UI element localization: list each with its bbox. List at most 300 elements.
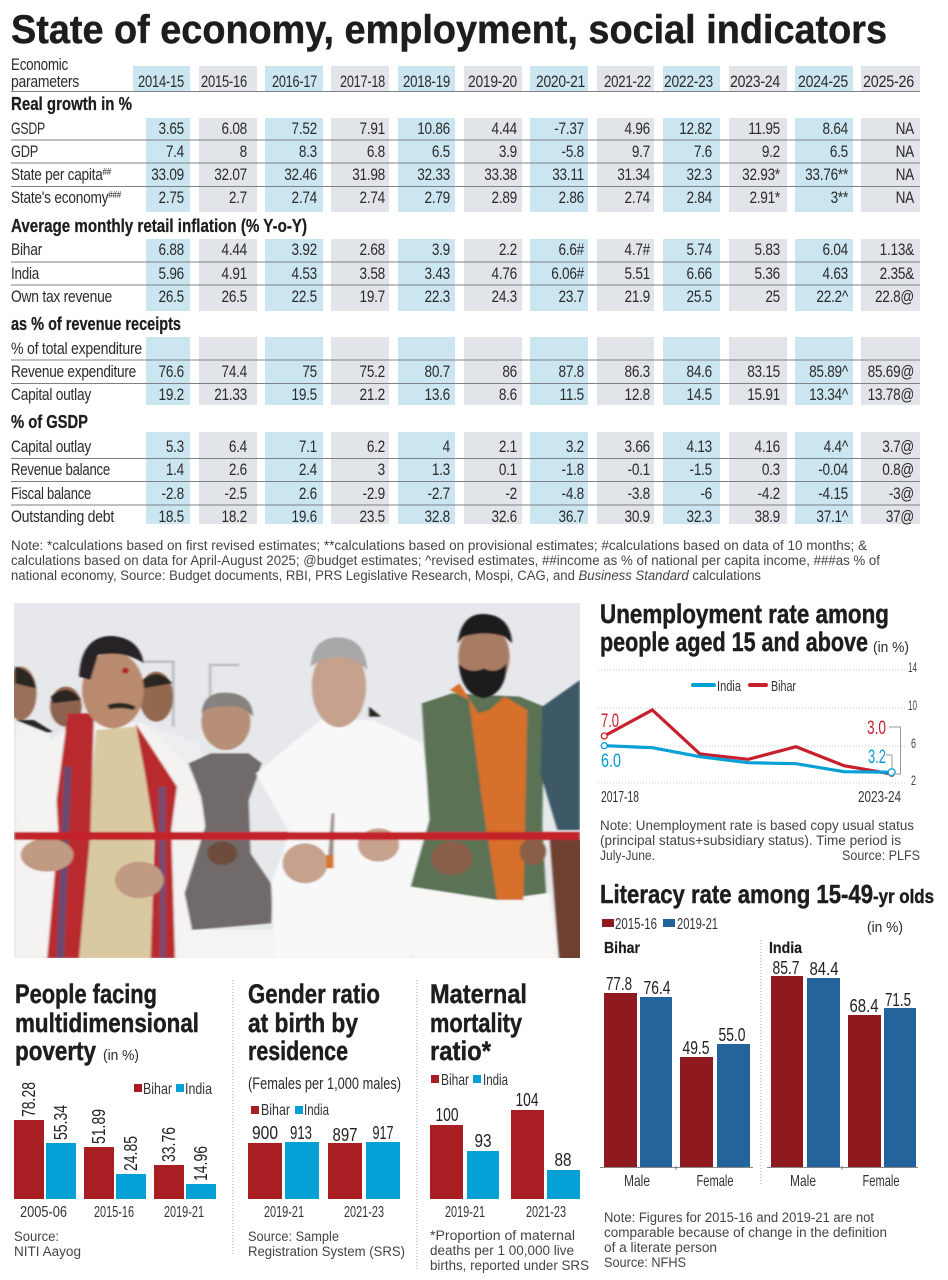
row: outstanding debt: 32.6 — [492, 508, 517, 526]
bar chart: poverty: 51.89 — [89, 1109, 109, 1144]
row: revenue expenditure: 86 — [502, 363, 517, 381]
row: capital outlay GSDP: 3.2 — [566, 438, 584, 456]
row: capital outlay GSDP: 4.4^ — [824, 438, 849, 456]
row: India inflation — [11, 264, 915, 283]
row: capital outlay GSDP: 4.16 — [755, 438, 780, 456]
row: GDP: 3.9 — [499, 143, 517, 161]
row: Bihar inflation: 2.2 — [499, 241, 517, 259]
row: GSDP: -7.37 — [554, 120, 584, 138]
heading: maternal mortality: Maternal — [430, 979, 527, 1009]
row: revenue balance: 2.4 — [299, 461, 318, 479]
row: Bihar inflation: 2.68 — [360, 241, 385, 259]
row: fiscal balance: -4.15 — [818, 485, 848, 503]
row: capital outlay GSDP: Capital outlay — [11, 437, 92, 456]
panel: unemployment rate — [598, 599, 920, 863]
row: Bihar inflation: 5.83 — [755, 241, 780, 259]
row: revenue balance: Revenue balance — [11, 460, 110, 479]
row: outstanding debt: 38.9 — [755, 508, 780, 526]
section heading: percent of GSDP: % of GSDP — [11, 412, 88, 432]
row: capital outlay GSDP: 4.13 — [687, 438, 712, 456]
bar chart: maternal mortality: 104 — [516, 1090, 538, 1110]
row: state's economy — [11, 188, 915, 207]
row: revenue expenditure: 86.3 — [625, 363, 650, 381]
row: state per capita: State per capita — [11, 165, 125, 184]
subtitle: gender ratio: (Females per 1,000 males) — [248, 1074, 401, 1093]
row: fiscal balance: -3@ — [889, 485, 914, 503]
heading: unemployment: people aged 15 and above — [600, 627, 868, 657]
row: outstanding debt: 30.9 — [625, 508, 650, 526]
row: state per capita: 32.93* — [742, 166, 780, 184]
bar chart: maternal mortality: 88 — [554, 1150, 572, 1170]
source: poverty: NITI Aayog — [14, 1244, 81, 1259]
row: GSDP: 6.08 — [222, 120, 247, 138]
row: Bihar inflation: 4.44 — [222, 241, 248, 259]
heading: poverty: poverty — [15, 1036, 96, 1066]
row: capital outlay GSDP: 6.2 — [367, 438, 385, 456]
row: revenue expenditure — [11, 362, 914, 381]
row: India inflation: 6.06# — [551, 265, 585, 283]
row: GSDP: 7.52 — [292, 120, 317, 138]
row: revenue expenditure: 74.4 — [222, 363, 248, 381]
row: India inflation: India — [11, 264, 40, 283]
row: state's economy: State's economy — [11, 188, 132, 207]
row: capital outlay GSDP: 3.66 — [625, 438, 650, 456]
row: outstanding debt: 37@ — [886, 508, 914, 526]
row: fiscal balance: -2.9 — [363, 485, 385, 503]
row: GDP: NA — [896, 143, 915, 161]
header row: 2016-17 — [272, 72, 317, 91]
row: Bihar inflation: 4.7# — [625, 241, 651, 259]
heading: literacy — [600, 879, 934, 936]
row: India inflation: 6.66 — [687, 265, 712, 283]
bar chart: Bihar literacy: 55.0 — [718, 1025, 746, 1045]
legend: poverty: Bihar — [143, 1081, 173, 1098]
bar chart: India literacy: 85.7 — [772, 958, 800, 978]
row: GSDP — [11, 119, 915, 138]
row: capital outlay share: 12.8 — [625, 386, 650, 404]
row: own tax revenue: 26.5 — [222, 288, 247, 306]
row: state's economy: 2.74 — [292, 189, 318, 207]
row: revenue expenditure: 75.2 — [360, 363, 385, 381]
row: own tax revenue: 24.3 — [492, 288, 517, 306]
row: state's economy: 2.89 — [492, 189, 517, 207]
row: outstanding debt — [11, 507, 914, 526]
bar chart: poverty: 2019-21 — [164, 1204, 204, 1221]
row: capital outlay share: 21.33 — [214, 386, 247, 404]
row: India inflation: 4.53 — [292, 265, 317, 283]
row: Bihar inflation: Bihar — [11, 240, 43, 259]
photo: ribbon cutting ceremony — [5, 603, 587, 962]
legend: literacy: 2015-16 — [615, 916, 657, 933]
background people — [14, 666, 202, 826]
note: literacy: Source: NFHS — [604, 1255, 686, 1270]
bar chart: poverty: 33.76 — [159, 1127, 179, 1162]
row: revenue balance: 0.1 — [499, 461, 517, 479]
legend: gender ratio: Bihar — [261, 1102, 291, 1119]
row: GSDP: 7.91 — [360, 120, 385, 138]
row: state per capita: NA — [896, 166, 915, 184]
note: maternal mortality: births, reported under SRS — [430, 1258, 589, 1273]
row: revenue balance: -0.04 — [818, 461, 849, 479]
row: GDP: 7.6 — [694, 143, 712, 161]
row: own tax revenue: 22.3 — [425, 288, 450, 306]
bar chart: Bihar literacy: Bihar — [604, 940, 640, 957]
heading: literacy: -yr olds — [873, 887, 934, 908]
table note: Note: *calculations based on first revised estimates; **calculations based on provisional estimates; #calculations based on data of 10 months; & — [11, 538, 867, 553]
row: GSDP: 11.95 — [748, 120, 780, 138]
row: revenue balance: 0.3 — [762, 461, 780, 479]
row: revenue expenditure: 85.69@ — [868, 363, 914, 381]
section heading: inflation: Average monthly retail inflation (% Y-o-Y) — [11, 216, 307, 236]
heading: gender ratio: residence — [248, 1036, 348, 1066]
panel: literacy rate — [600, 879, 934, 1270]
header row: 2015-16 — [201, 72, 247, 91]
source: gender ratio — [248, 1229, 405, 1259]
note: maternal mortality — [430, 1228, 589, 1273]
row: revenue expenditure: 76.6 — [159, 363, 184, 381]
heading: poverty: People facing — [15, 979, 157, 1009]
row: GSDP: 4.44 — [492, 120, 518, 138]
row: Bihar inflation: 6.88 — [159, 241, 184, 259]
man with red scarf — [15, 636, 211, 958]
legend: maternal mortality — [431, 1072, 508, 1089]
row: state's economy: 2.75 — [159, 189, 184, 207]
row: fiscal balance: 2.6 — [299, 485, 317, 503]
row: fiscal balance: -2 — [505, 485, 517, 503]
man in grey vest — [185, 693, 275, 958]
bar chart: gender ratio: 2021-23 — [344, 1204, 384, 1221]
note: unemployment: (principal status+subsidiary status). Time period is — [600, 833, 901, 848]
row: state's economy: 2.74 — [360, 189, 386, 207]
bar chart: Bihar literacy — [600, 940, 753, 1190]
row: state per capita: 32.46 — [284, 166, 317, 184]
bar chart: poverty: 14.96 — [191, 1146, 211, 1181]
bar chart: India literacy: Female — [862, 1173, 900, 1190]
row: India inflation: 2.35& — [880, 265, 915, 283]
row: GDP: 6.5 — [830, 143, 848, 161]
row: Bihar inflation: 6.04 — [823, 241, 849, 259]
header row: parameters — [11, 72, 79, 91]
header row: 2018-19 — [403, 72, 450, 91]
row: state's economy: 2.86 — [559, 189, 584, 207]
bar chart: maternal mortality: 93 — [474, 1131, 492, 1151]
header row: 2020-21 — [536, 72, 585, 91]
row: state per capita — [11, 165, 915, 184]
title: State of economy, employment, social indicators — [11, 8, 887, 52]
row: capital outlay GSDP: 5.3 — [166, 438, 184, 456]
heading: poverty: multidimensional — [15, 1008, 199, 1038]
heading: maternal mortality: ratio* — [430, 1036, 491, 1066]
header row: 2023-24 — [730, 72, 780, 91]
row: India inflation: 4.76 — [492, 265, 517, 283]
row: GSDP: 3.65 — [159, 120, 184, 138]
line chart: unemployment: 10 — [908, 697, 917, 713]
heading: maternal mortality — [430, 979, 527, 1066]
row: own tax revenue: 22.5 — [292, 288, 317, 306]
legend: literacy — [602, 916, 718, 933]
legend: maternal mortality: Bihar — [441, 1072, 469, 1089]
row: state per capita: 32.3 — [687, 166, 712, 184]
row: revenue balance: 0.8@ — [882, 461, 914, 479]
bar chart: India literacy: 71.5 — [885, 990, 911, 1010]
row: own tax revenue: 25 — [765, 288, 780, 306]
heading: gender ratio — [248, 979, 380, 1066]
legend: poverty: India — [185, 1081, 212, 1098]
note: unemployment: Note: Unemployment rate is based copy usual status — [600, 818, 914, 833]
row: state per capita: 31.34 — [617, 166, 651, 184]
row: fiscal balance: -2.5 — [225, 485, 247, 503]
bar chart: Bihar literacy: Female — [696, 1173, 734, 1190]
row: GDP: 7.4 — [166, 143, 185, 161]
row: GDP: GDP — [11, 142, 38, 161]
row: own tax revenue: 25.5 — [687, 288, 712, 306]
table note — [11, 538, 880, 583]
row: Bihar inflation: 1.13& — [880, 241, 915, 259]
row: capital outlay GSDP: 6.4 — [229, 438, 248, 456]
row: India inflation: 4.91 — [222, 265, 247, 283]
row: percent of total expenditure: % of total expenditure — [11, 339, 142, 358]
row: state per capita: 33.09 — [151, 166, 184, 184]
bar chart: India literacy: India — [769, 940, 802, 957]
bar chart: poverty: 2015-16 — [94, 1204, 134, 1221]
bar chart: poverty: 2005-06 — [20, 1204, 67, 1221]
header row: 2017-18 — [340, 72, 385, 91]
row: revenue balance: 3 — [378, 461, 385, 479]
bar chart: Bihar literacy: Male — [624, 1173, 650, 1190]
row: India inflation: 3.43 — [425, 265, 450, 283]
row: revenue balance: 1.3 — [432, 461, 450, 479]
note: maternal mortality: *Proportion of maternal — [430, 1228, 575, 1243]
row: capital outlay share: 13.6 — [425, 386, 450, 404]
row: outstanding debt: 32.8 — [425, 508, 450, 526]
bar chart: poverty: 55.34 — [51, 1105, 71, 1140]
row: state's economy: 2.7 — [229, 189, 247, 207]
row: state per capita: 32.07 — [214, 166, 247, 184]
row: capital outlay share — [11, 385, 914, 404]
header row: 2014-15 — [138, 72, 184, 91]
row: revenue balance: 1.4 — [166, 461, 185, 479]
row: capital outlay share: 15.91 — [747, 386, 780, 404]
row: fiscal balance: -6 — [700, 485, 712, 503]
bar chart: gender ratio — [248, 1123, 400, 1221]
panel: multidimensional poverty — [14, 979, 216, 1259]
bar chart: gender ratio: 900 — [252, 1123, 278, 1143]
heading: gender ratio: at birth by — [248, 1008, 358, 1038]
note: maternal mortality: deaths per 1 00,000 live — [430, 1243, 574, 1258]
row: own tax revenue — [11, 287, 914, 306]
row: GSDP: 4.96 — [625, 120, 650, 138]
header row: 2024-25 — [798, 72, 848, 91]
row: own tax revenue: 22.2^ — [816, 288, 849, 306]
line chart: unemployment — [598, 659, 917, 806]
row: India inflation: 4.63 — [823, 265, 848, 283]
bar chart: India literacy: 68.4 — [850, 996, 878, 1016]
row: own tax revenue: 19.7 — [360, 288, 385, 306]
row: state's economy: NA — [896, 189, 915, 207]
line chart: unemployment: 14 — [908, 659, 917, 675]
row: GDP: 6.8 — [367, 143, 385, 161]
man at right edge — [540, 680, 580, 958]
row: GSDP: 10.86 — [417, 120, 450, 138]
line chart: unemployment: 2023-24 — [858, 789, 901, 806]
panel: maternal mortality ratio — [430, 979, 589, 1273]
table note: national economy, Source: Budget documents, RBI, PRS Legislative Research, Mospi, CAG, and Business Standard calculations — [11, 568, 761, 583]
row: outstanding debt: 36.7 — [559, 508, 584, 526]
note: unemployment — [600, 818, 920, 863]
row: GDP: 9.7 — [632, 143, 650, 161]
row: capital outlay share: 21.2 — [360, 386, 385, 404]
header row: 2021-22 — [604, 72, 651, 91]
header row: 2022-23 — [664, 72, 713, 91]
row: GDP — [11, 142, 915, 161]
row: GSDP: 8.64 — [823, 120, 849, 138]
row: capital outlay share: Capital outlay — [11, 385, 92, 404]
row: revenue expenditure: 75 — [302, 363, 317, 381]
row: capital outlay share: 11.5 — [560, 386, 584, 404]
heading: unemployment: (in %) — [873, 639, 909, 656]
section heading: real growth: Real growth in % — [11, 94, 132, 114]
row: revenue expenditure: 87.8 — [559, 363, 584, 381]
heading: literacy: (in %) — [867, 919, 903, 936]
row: capital outlay share: 14.5 — [687, 386, 712, 404]
line chart: unemployment: Bihar — [771, 678, 796, 695]
bar chart: maternal mortality — [430, 1090, 580, 1221]
row: fiscal balance — [11, 484, 914, 503]
heading: unemployment — [600, 599, 909, 657]
row: outstanding debt: Outstanding debt — [11, 507, 114, 526]
source: poverty — [14, 1229, 81, 1259]
bar chart: gender ratio: 913 — [290, 1123, 312, 1143]
row: state's economy: 3** — [831, 189, 848, 207]
row: state per capita: 33.11 — [552, 166, 584, 184]
row: capital outlay GSDP: 4 — [443, 438, 451, 456]
row: GSDP: GSDP — [11, 119, 45, 138]
row: GDP: 8 — [240, 143, 247, 161]
heading: poverty — [15, 979, 199, 1066]
bar chart: poverty — [14, 1082, 216, 1221]
line chart: unemployment: 2017-18 — [601, 789, 639, 806]
line chart: unemployment: 3.2 — [868, 747, 886, 768]
row: state's economy: 2.79 — [425, 189, 450, 207]
legend: poverty — [134, 1081, 212, 1098]
header row: Economic — [11, 55, 69, 74]
row: India inflation: 3.58 — [360, 265, 385, 283]
row: own tax revenue: 22.8@ — [875, 288, 914, 306]
man in white kurta — [256, 637, 433, 958]
row: own tax revenue: 23.7 — [559, 288, 584, 306]
line chart: unemployment: 6.0 — [601, 751, 621, 772]
row: state's economy: ### — [108, 190, 122, 201]
row: revenue expenditure: 80.7 — [425, 363, 450, 381]
note: unemployment: July-June. — [600, 848, 655, 863]
row: Bihar inflation: 3.92 — [292, 241, 317, 259]
bar chart: maternal mortality: 2021-23 — [526, 1204, 566, 1221]
row: capital outlay share: 19.2 — [159, 386, 184, 404]
row: capital outlay share: 19.5 — [292, 386, 317, 404]
row: outstanding debt: 23.5 — [360, 508, 385, 526]
row: capital outlay share: 13.78@ — [868, 386, 914, 404]
row: Bihar inflation: 5.74 — [687, 241, 713, 259]
row: capital outlay GSDP: 2.1 — [499, 438, 517, 456]
heading: maternal mortality: mortality — [430, 1008, 522, 1038]
legend: maternal mortality: India — [483, 1072, 508, 1089]
header row — [11, 55, 914, 91]
table note: calculations based on data for April-August 2025; @budget estimates; ^revised estimates, ##income as % of national per capita income, ###as % of — [11, 553, 880, 568]
row: India inflation: 5.51 — [625, 265, 650, 283]
bar chart: maternal mortality: 100 — [436, 1105, 458, 1125]
legend: literacy: 2019-21 — [677, 916, 718, 933]
row: GSDP: NA — [896, 120, 915, 138]
bar chart: Bihar literacy: 49.5 — [682, 1038, 710, 1058]
row: GDP: 6.5 — [432, 143, 450, 161]
row: fiscal balance: -2.8 — [162, 485, 184, 503]
bar chart: Bihar literacy: 77.8 — [606, 974, 632, 994]
bar chart: gender ratio: 917 — [372, 1123, 394, 1143]
row: state per capita: 33.76** — [805, 166, 848, 184]
row: India inflation: 5.36 — [755, 265, 780, 283]
bar chart: poverty: 24.85 — [121, 1136, 141, 1171]
legend: gender ratio — [251, 1102, 329, 1119]
row: outstanding debt: 32.3 — [687, 508, 712, 526]
row: capital outlay share: 8.6 — [499, 386, 517, 404]
bar chart: Bihar literacy: 76.4 — [644, 978, 670, 998]
note: literacy: of a literate person — [604, 1240, 717, 1255]
row: outstanding debt: 19.6 — [292, 508, 317, 526]
row: outstanding debt: 18.2 — [222, 508, 247, 526]
row: outstanding debt: 18.5 — [159, 508, 184, 526]
row: revenue balance: -0.1 — [628, 461, 650, 479]
bar chart: India literacy: Male — [790, 1173, 816, 1190]
row: revenue balance: -1.5 — [690, 461, 712, 479]
row: Bihar inflation: 3.9 — [432, 241, 450, 259]
row: own tax revenue: 21.9 — [625, 288, 650, 306]
background poles — [141, 662, 239, 727]
bar chart: India literacy: 84.4 — [810, 959, 838, 979]
row: fiscal balance: -4.2 — [758, 485, 780, 503]
row: capital outlay GSDP — [11, 437, 914, 456]
note: literacy: comparable because of change in the definition — [604, 1225, 887, 1240]
source: poverty: Source: — [14, 1229, 59, 1244]
row: fiscal balance: -2.7 — [428, 485, 450, 503]
heading: gender ratio: Gender ratio — [248, 979, 380, 1009]
section heading: revenue receipts: as % of revenue receipts — [11, 314, 181, 334]
row: GSDP: 12.82 — [679, 120, 712, 138]
row: revenue expenditure: 84.6 — [687, 363, 712, 381]
row: revenue expenditure: 83.15 — [747, 363, 780, 381]
legend: gender ratio: India — [304, 1102, 329, 1119]
header row: 2025-26 — [863, 72, 914, 91]
bar chart: poverty: 78.28 — [19, 1082, 39, 1117]
bar chart: gender ratio: 2019-21 — [264, 1204, 304, 1221]
row: own tax revenue: 26.5 — [159, 288, 184, 306]
table: economic parameters — [11, 55, 920, 526]
row: state's economy: 2.91* — [749, 189, 780, 207]
note: literacy: Note: Figures for 2015-16 and 2019-21 are not — [604, 1210, 874, 1225]
row: India inflation: 5.96 — [159, 265, 184, 283]
source: gender ratio: Registration System (SRS) — [248, 1244, 405, 1259]
ribbon — [14, 832, 580, 840]
man with orange stole — [410, 614, 557, 958]
row: state per capita: ## — [103, 167, 112, 178]
row: state per capita: 33.38 — [484, 166, 517, 184]
row: GDP: 8.3 — [299, 143, 317, 161]
row: revenue expenditure: 85.89^ — [809, 363, 849, 381]
heading: unemployment: Unemployment rate among — [600, 599, 889, 629]
heading: poverty: (in %) — [103, 1047, 139, 1064]
source: gender ratio: Source: Sample — [248, 1229, 339, 1244]
row: outstanding debt: 37.1^ — [816, 508, 849, 526]
row: capital outlay GSDP: 3.7@ — [882, 438, 914, 456]
